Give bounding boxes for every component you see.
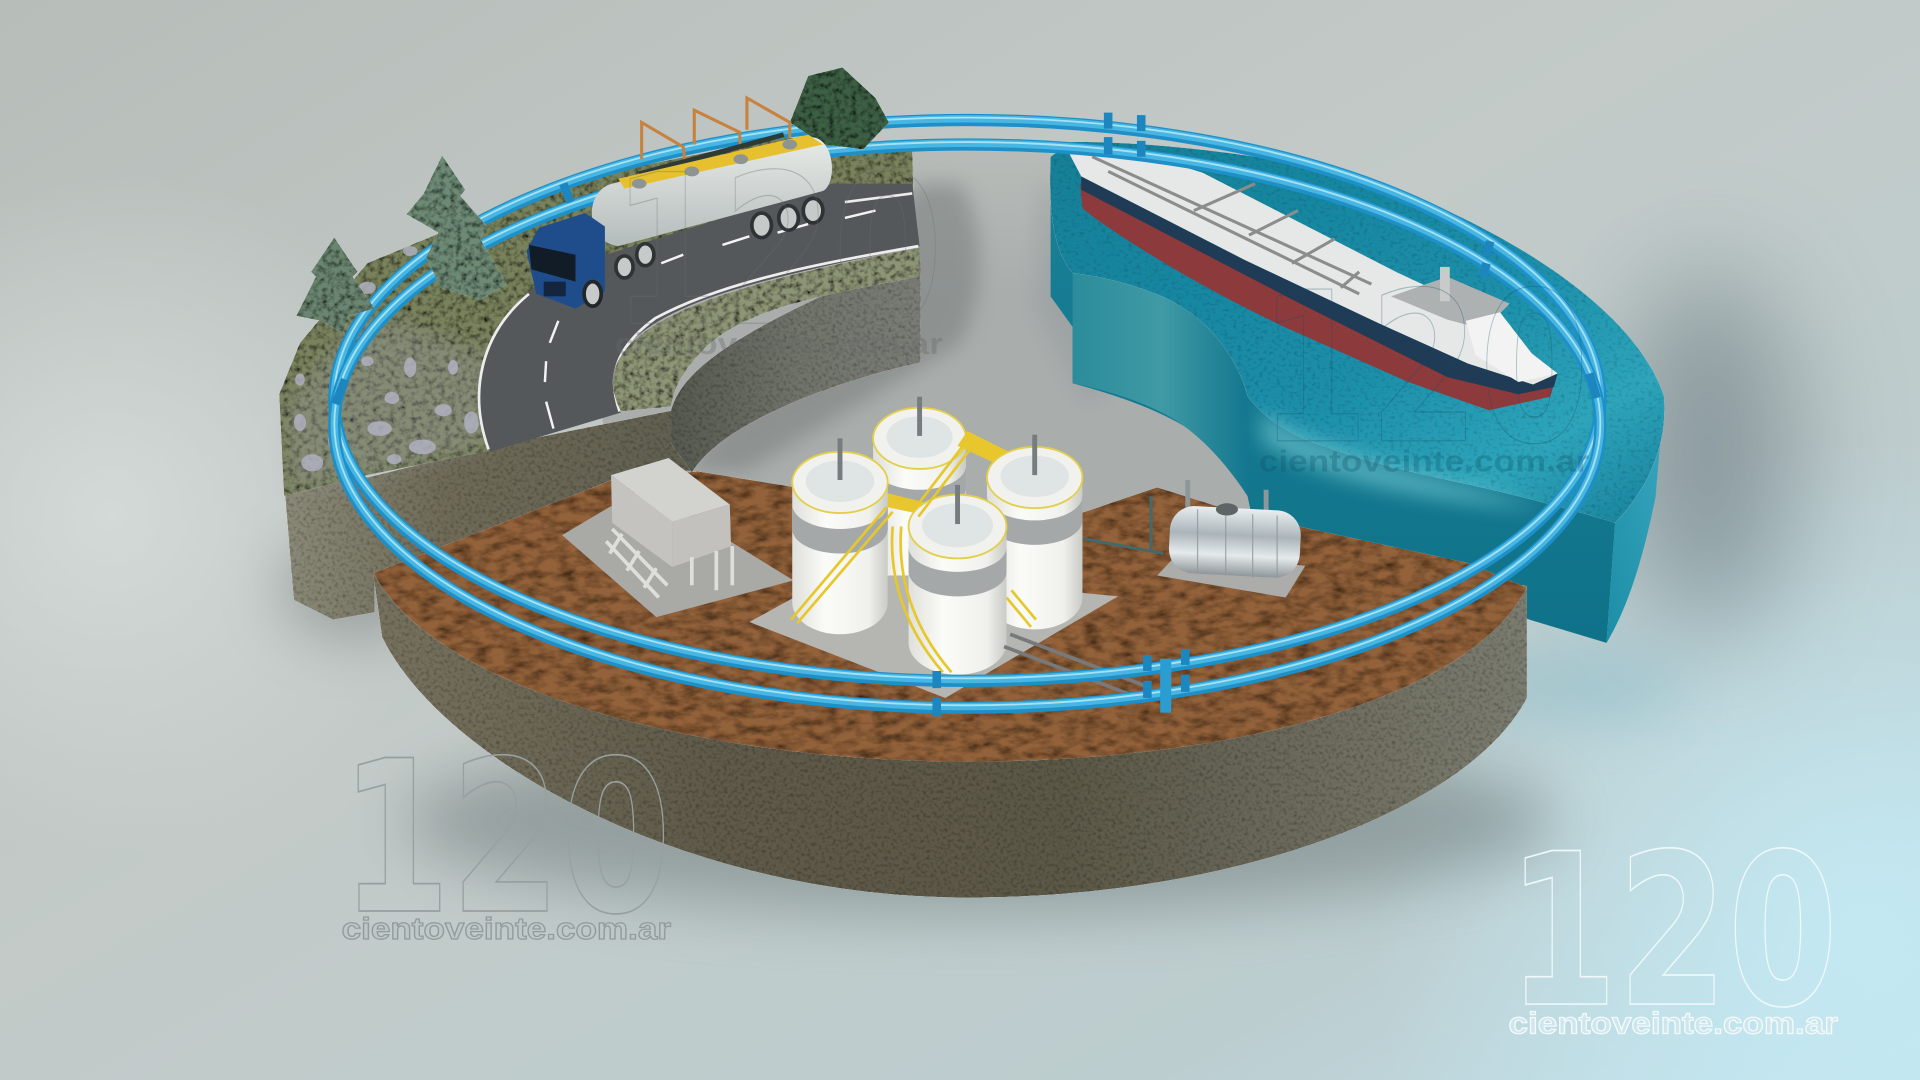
storage tank farm bbox=[749, 397, 1145, 698]
inner rock wall bbox=[671, 251, 921, 473]
road asphalt bbox=[480, 184, 920, 452]
tanker truck bbox=[527, 98, 832, 309]
small pine bbox=[296, 238, 375, 333]
water outer face bbox=[1607, 397, 1665, 643]
concrete base plate bbox=[749, 569, 1118, 698]
earth top surface bbox=[373, 471, 1527, 762]
yellow staircases bbox=[791, 443, 1036, 672]
road dashed centre line bbox=[545, 211, 876, 429]
right tank bbox=[987, 435, 1082, 629]
orange safety railing bbox=[642, 98, 790, 169]
mossy top surface bbox=[279, 137, 913, 496]
moss strip beside road bbox=[613, 247, 920, 411]
left tank bbox=[792, 438, 888, 634]
horizontal storage tank bbox=[1084, 480, 1305, 598]
building stairs and piping bbox=[606, 529, 732, 598]
earth platform bbox=[373, 471, 1527, 898]
rear wheels bbox=[616, 198, 823, 278]
left and centre pine trees bbox=[296, 156, 507, 333]
dark catwalk bbox=[639, 135, 784, 174]
watermark text on water: cientoveinte.com.ar bbox=[1259, 444, 1589, 478]
hull red bbox=[1080, 184, 1554, 410]
cab front wheel bbox=[584, 282, 601, 306]
building base plate bbox=[562, 487, 793, 617]
tank vents bbox=[1188, 480, 1266, 527]
earth side wall bbox=[373, 576, 1527, 898]
light ripples bbox=[1261, 410, 1543, 508]
water block bbox=[1050, 142, 1665, 643]
building top bbox=[611, 458, 730, 522]
trailer hatches bbox=[632, 140, 797, 189]
round dark tree bbox=[790, 67, 889, 149]
watermark text bottom right: cientoveinte.com.ar bbox=[1509, 1006, 1838, 1040]
blue pipeline ring bbox=[334, 113, 1600, 716]
watermark text top: cientoveinte.com.ar bbox=[615, 327, 943, 361]
trailer yellow top strip bbox=[618, 135, 823, 189]
building right face bbox=[672, 504, 731, 567]
tall pine bbox=[407, 156, 507, 300]
water silhouette and cut face bbox=[1051, 142, 1665, 643]
lavender rock wash bbox=[288, 318, 490, 490]
back tank bbox=[873, 397, 966, 576]
rock outer wall bbox=[282, 410, 692, 620]
road white edge lines bbox=[479, 193, 918, 449]
truck cab bbox=[527, 213, 605, 309]
cab windscreen bbox=[529, 245, 576, 282]
deck bbox=[1069, 146, 1558, 384]
oil tanker ship bbox=[1069, 146, 1558, 410]
trailer tank bbox=[592, 137, 832, 246]
tank cylinder bbox=[1168, 505, 1302, 579]
pale stones on moss bbox=[294, 246, 479, 474]
front tank bbox=[909, 485, 1007, 675]
bridge superstructure bbox=[1391, 277, 1510, 329]
yellow walkways between tanks bbox=[884, 431, 1011, 514]
inner floor with shadow bbox=[600, 147, 1335, 637]
tank base plate bbox=[1157, 553, 1305, 598]
building front face bbox=[611, 475, 672, 567]
pipe flange collars bbox=[336, 113, 1597, 716]
rock and road land block bbox=[279, 137, 921, 620]
soft shadows on the floor bbox=[282, 269, 1794, 912]
bay wall bbox=[1073, 273, 1251, 502]
cab grille bbox=[544, 282, 566, 296]
watermark: logo on water: 120 bbox=[1259, 249, 1589, 491]
water surface bbox=[1050, 142, 1665, 523]
utility building bbox=[562, 458, 793, 617]
watermark: logo behind scene top: 120 bbox=[612, 131, 943, 373]
T-junction riser bbox=[1161, 659, 1170, 713]
hull navy band bbox=[1081, 176, 1558, 394]
deck pipework bbox=[1092, 157, 1371, 294]
connecting line bbox=[1084, 496, 1163, 553]
lower pipe bbox=[334, 142, 1600, 708]
watermark text bottom left: cientoveinte.com.ar bbox=[342, 912, 671, 946]
watermark: grey logo bottom left: 120 bbox=[340, 716, 671, 961]
grey service pipes bbox=[1004, 634, 1145, 696]
upper pipe bbox=[334, 118, 1600, 681]
